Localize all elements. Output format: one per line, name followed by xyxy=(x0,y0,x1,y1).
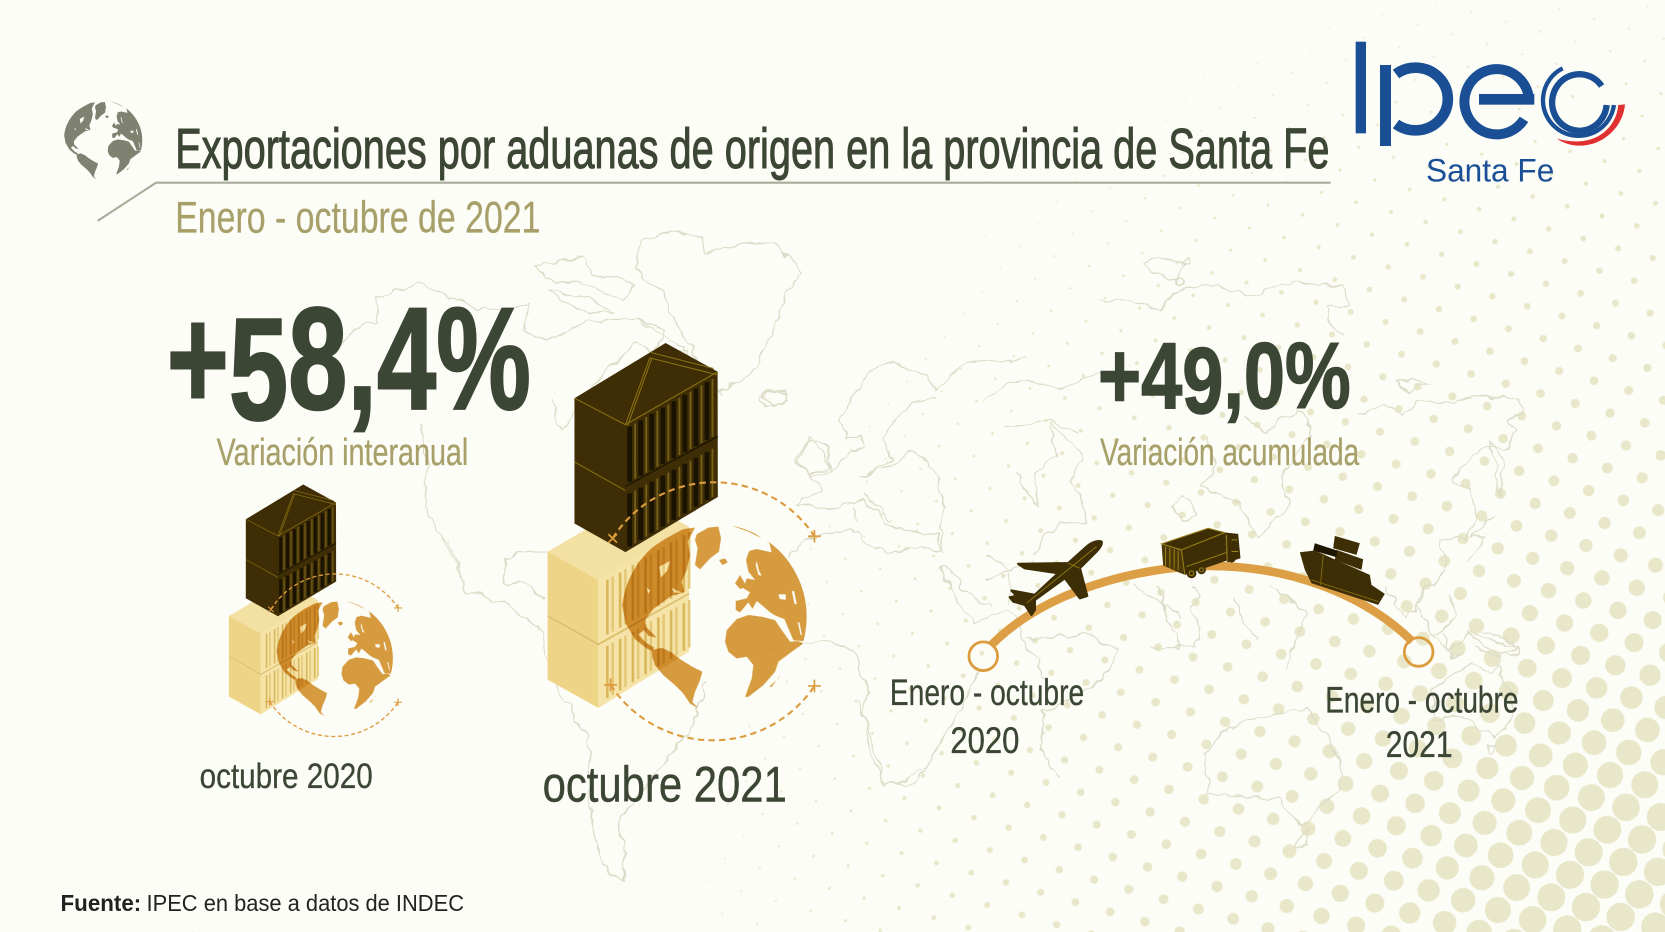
timeline arc xyxy=(991,566,1412,646)
label: octubre 2020: octubre 2020 xyxy=(200,757,373,796)
icon: small globe xyxy=(64,102,143,179)
timeline start marker xyxy=(969,642,998,671)
containers and globe: octubre 2020 xyxy=(229,484,402,737)
label: octubre 2021: octubre 2021 xyxy=(543,757,787,813)
logo: Ipec Santa Fe: Santa Fe xyxy=(1426,153,1554,189)
icon: airplane xyxy=(1010,541,1102,615)
label: Enero - octubre 2021: Enero - octubre xyxy=(1325,679,1518,721)
label: Variación acumulada: Variación acumulada xyxy=(1100,431,1360,474)
label: Enero - octubre 2020: Enero - octubre xyxy=(890,671,1084,713)
stat: +58,4%: + xyxy=(167,277,252,440)
source note: Fuente: xyxy=(61,890,141,916)
stat: +49,0%: ,0% xyxy=(1223,323,1351,428)
world map outline xyxy=(339,230,1522,881)
icon: truck xyxy=(1162,528,1241,578)
label: Enero - octubre 2021: 2021 xyxy=(1386,723,1453,765)
label: Enero - octubre 2020 xyxy=(890,671,1084,761)
icon: ship xyxy=(1300,536,1385,605)
label: Enero - octubre 2021 xyxy=(1325,679,1518,765)
label: Variación interanual: Variación interanual xyxy=(217,431,468,474)
title underline xyxy=(98,183,1331,221)
stat: +58,4%: 5 xyxy=(229,287,288,450)
containers and globe: octubre 2021 xyxy=(548,343,821,740)
stat: +49,0%: +4 xyxy=(1098,323,1205,428)
timeline end marker xyxy=(1404,638,1433,666)
source note: IPEC en base a datos de INDEC xyxy=(147,890,464,916)
stat: +58,4%: 8,4% xyxy=(288,277,531,440)
stat: +49,0%: 9 xyxy=(1182,328,1223,433)
subtitle: Enero - octubre de 2021 xyxy=(175,194,540,243)
logo: Ipec Santa Fe xyxy=(1356,42,1625,189)
label: Enero - octubre 2020: 2020 xyxy=(950,719,1019,761)
